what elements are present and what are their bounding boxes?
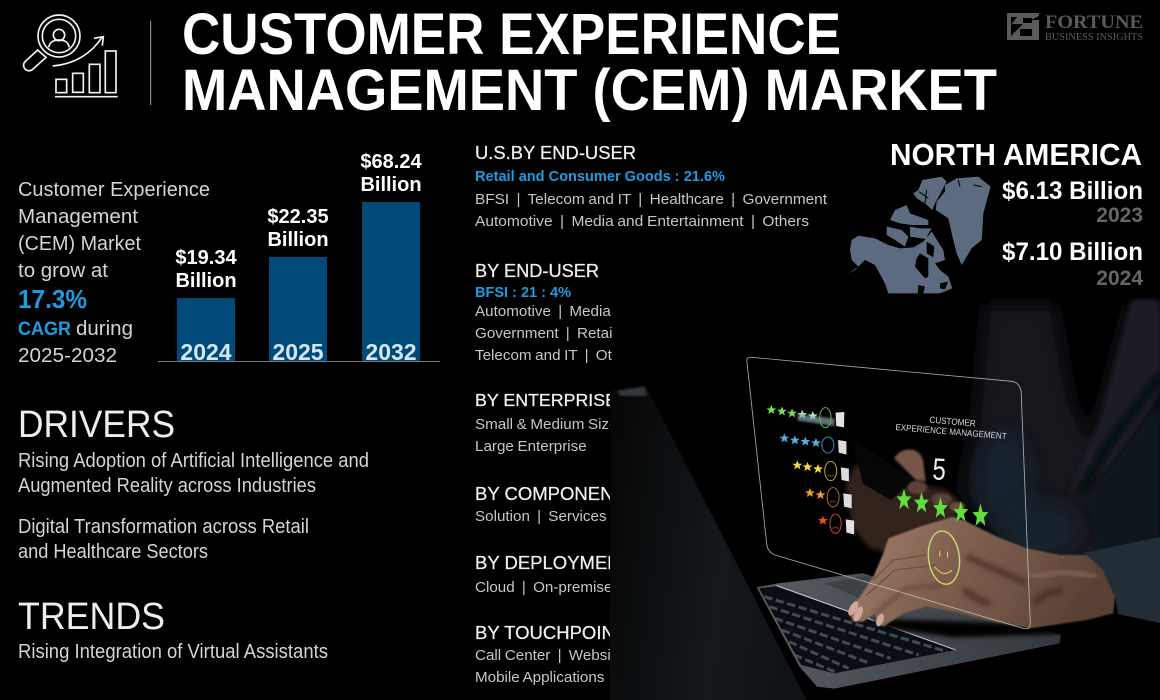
drivers xyxy=(18,404,369,563)
drivers: Rising Adoption of Artificial Intelligence and xyxy=(18,450,369,472)
trends: TRENDS xyxy=(18,596,165,638)
segment: by component: BY COMPONENT xyxy=(475,483,625,504)
bar chart: market size: Billion xyxy=(360,174,422,196)
header icon: magnifier and growth chart xyxy=(24,15,118,97)
CAGR text block: CAGR xyxy=(18,319,71,340)
title: CUSTOMER EXPERIENCE xyxy=(182,2,841,67)
rating panel: EXPERIENCE MANAGEMENT xyxy=(895,422,1007,441)
foreground hand xyxy=(846,517,1115,637)
segment: by touchpoint: Mobile Applications xyxy=(475,669,605,686)
segment: by touchpoint xyxy=(475,622,626,686)
segment: by enterprise size: Large Enterprise xyxy=(475,438,587,455)
segment: by touchpoint: Call Center | Website xyxy=(475,647,623,664)
segment: by enterprise size xyxy=(475,390,698,455)
title: MANAGEMENT (CEM) MARKET xyxy=(182,58,997,123)
segment: by enterprise size: BY ENTERPRISE SIZE xyxy=(475,390,662,410)
North America heading: NORTH AMERICA xyxy=(890,137,1142,172)
North America values: $7.10 Billion xyxy=(1002,238,1143,266)
trends xyxy=(18,596,328,663)
title xyxy=(182,2,997,123)
photo: hands on laptop with rating panel xyxy=(610,293,1160,700)
segment: by deployment: Cloud | On-premises xyxy=(475,579,620,596)
bar chart: market size: $22.35 xyxy=(267,206,329,228)
segment: by deployment: BY DEPLOYMENT xyxy=(475,552,632,573)
rating panel xyxy=(747,357,1030,629)
segment: by end-user: BY END-USER xyxy=(475,260,599,281)
logo: Fortune Business Insights xyxy=(1007,12,1143,43)
segment: by end-user: BFSI : 21 : 4% xyxy=(475,285,571,301)
North America map xyxy=(848,177,991,293)
segment: U.S. by end-user: U.S.BY END-USER xyxy=(475,142,636,163)
drivers: Digital Transformation across Retail xyxy=(18,516,309,538)
drivers: and Healthcare Sectors xyxy=(18,541,208,563)
North America values: $6.13 Billion xyxy=(1002,177,1143,205)
bar chart: market size: $19.34 xyxy=(175,247,237,269)
CAGR text block: Management xyxy=(18,206,138,228)
segment: by end-user: Telecom and IT | Others xyxy=(475,347,642,364)
bar chart: market size: $68.24 xyxy=(360,151,422,173)
North America values xyxy=(1002,177,1143,290)
laptop base and keyboard xyxy=(757,573,1061,689)
trends: Rising Integration of Virtual Assistants xyxy=(18,641,328,663)
North America values: 2024 xyxy=(1096,267,1143,290)
CAGR text block xyxy=(18,179,210,367)
CAGR text block: (CEM) Market xyxy=(18,233,141,255)
CAGR text block: 17.3% xyxy=(18,284,87,314)
segment: by enterprise size: Small & Medium Size Enterprises xyxy=(475,416,698,433)
segment: by end-user: Automotive | Media and Entertainment xyxy=(475,303,739,320)
segment: by end-user: Government | Retail and Consumer Goods xyxy=(475,325,767,342)
sweater background xyxy=(960,300,1160,570)
rating panel: 5 xyxy=(932,452,947,487)
logo: Fortune Business Insights: FORTUNE xyxy=(1045,12,1143,33)
bar chart: market size: 2025 xyxy=(272,339,324,365)
segment: by component xyxy=(475,483,625,525)
segment: by deployment xyxy=(475,552,632,596)
bar chart: market size: 2032 xyxy=(365,339,417,365)
bar chart: market size xyxy=(158,151,440,365)
rating panel: CUSTOMER xyxy=(929,415,976,428)
CAGR text block: 2025-2032 xyxy=(18,345,117,367)
logo: Fortune Business Insights: BUSINESS INSIGHTS xyxy=(1045,32,1143,43)
segment: by end-user xyxy=(475,260,767,364)
background hand with phone xyxy=(846,440,965,553)
segment: U.S. by end-user: BFSI | Telecom and IT | Healthcare | Government xyxy=(475,191,828,208)
segment: U.S. by end-user: Automotive | Media and Entertainment | Others xyxy=(475,213,809,230)
segment: U.S. by end-user xyxy=(475,142,828,230)
segment: by component: Solution | Services xyxy=(475,508,607,525)
bar chart: market size: Billion xyxy=(175,270,237,292)
CAGR text block: during xyxy=(76,318,133,340)
CAGR text block: Customer Experience xyxy=(18,179,210,201)
drivers: DRIVERS xyxy=(18,404,175,446)
sleeve xyxy=(1083,537,1160,623)
CAGR text block: to grow at xyxy=(18,260,108,282)
laptop lid xyxy=(610,386,806,700)
segment: by touchpoint: BY TOUCHPOINT xyxy=(475,622,626,643)
segment: U.S. by end-user: Retail and Consumer Goods : 21.6% xyxy=(475,169,725,185)
bar chart: market size: Billion xyxy=(267,229,329,251)
North America values: 2023 xyxy=(1096,204,1143,227)
drivers: Augmented Reality across Industries xyxy=(18,475,316,497)
bar chart: market size: 2024 xyxy=(180,339,232,365)
